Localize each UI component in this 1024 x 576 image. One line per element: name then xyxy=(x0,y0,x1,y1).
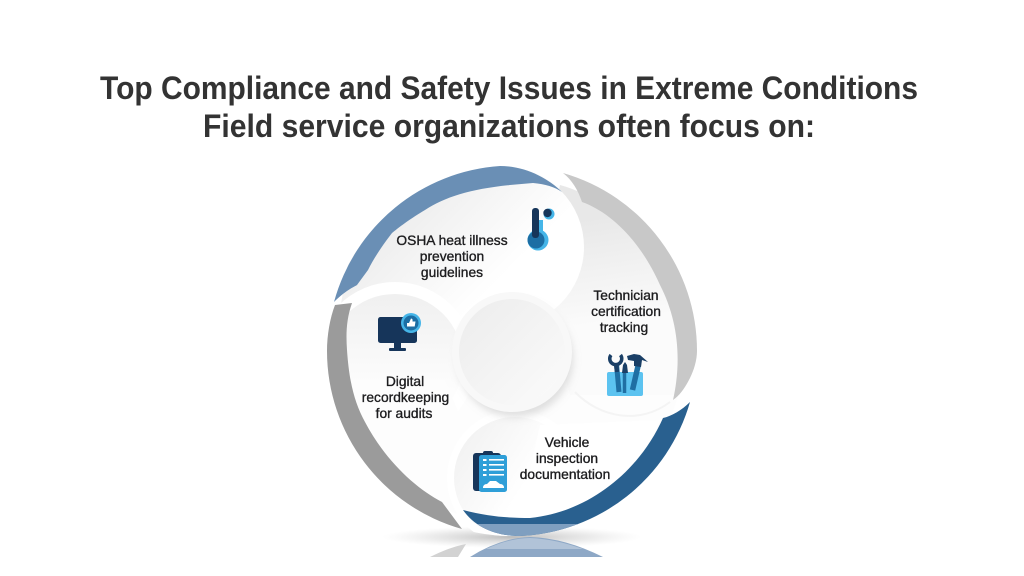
petal: left lobe rim xyxy=(341,282,418,311)
label: Technician certification tracking: Technician xyxy=(593,288,659,303)
petal: bottom lobe xyxy=(454,419,508,536)
ring: bottom arc lighter band xyxy=(477,524,578,536)
label: Technician certification tracking: certification xyxy=(591,304,661,319)
label: OSHA heat illness prevention guidelines: OSHA heat illness xyxy=(396,233,508,248)
label: Vehicle inspection documentation: documentation xyxy=(520,467,610,482)
center ring xyxy=(452,292,572,412)
center disc xyxy=(459,299,565,405)
icon: vehicle inspection clipboard xyxy=(473,451,507,492)
label: Technician certification tracking: tracking xyxy=(600,320,648,335)
ring: bottom dark blue arc xyxy=(463,402,690,536)
center disc shadow xyxy=(457,301,573,417)
label: Vehicle inspection documentation: inspection xyxy=(536,451,598,466)
label: Vehicle inspection documentation: Vehicle xyxy=(545,435,590,450)
petals clipped to the circle xyxy=(342,184,670,536)
ring: left grey arc xyxy=(327,303,462,529)
title: Field service organizations often focus on: xyxy=(203,108,815,144)
petal: bottom right fill xyxy=(530,420,660,518)
label: Digital recordkeeping for audits xyxy=(362,374,449,421)
label: Digital recordkeeping for audits: Digital xyxy=(386,374,424,389)
label: Digital recordkeeping for audits: for audits xyxy=(376,406,432,421)
icon: thermometer xyxy=(528,208,554,250)
petal: bottom lobe rim xyxy=(470,528,506,536)
title xyxy=(100,70,918,144)
petal: left lower fade xyxy=(346,380,470,505)
circular diagram xyxy=(315,166,697,546)
icon: monitor with thumbs up xyxy=(378,313,421,351)
ground reflection and shadow xyxy=(382,526,642,557)
petal: inner base xyxy=(340,179,684,523)
label: Vehicle inspection documentation xyxy=(520,435,610,482)
icon: toolbox with tools xyxy=(607,354,648,396)
ring: right grey arc xyxy=(563,173,697,400)
petal: top lobe xyxy=(540,190,584,308)
label: OSHA heat illness prevention guidelines: prevention xyxy=(420,249,484,264)
petal: top-left area xyxy=(342,204,436,302)
petal: left lobe xyxy=(346,294,456,346)
ring: top blue arc xyxy=(334,166,562,302)
petal: bottom rim of right lobe xyxy=(577,395,670,416)
label: Technician certification tracking xyxy=(591,288,661,335)
label: OSHA heat illness prevention guidelines: guidelines xyxy=(421,265,483,280)
petal: right area xyxy=(559,185,658,294)
title: Top Compliance and Safety Issues in Extreme Conditions xyxy=(100,70,918,106)
label: Digital recordkeeping for audits: recordkeeping xyxy=(362,390,449,405)
label: OSHA heat illness prevention guidelines xyxy=(396,233,508,280)
